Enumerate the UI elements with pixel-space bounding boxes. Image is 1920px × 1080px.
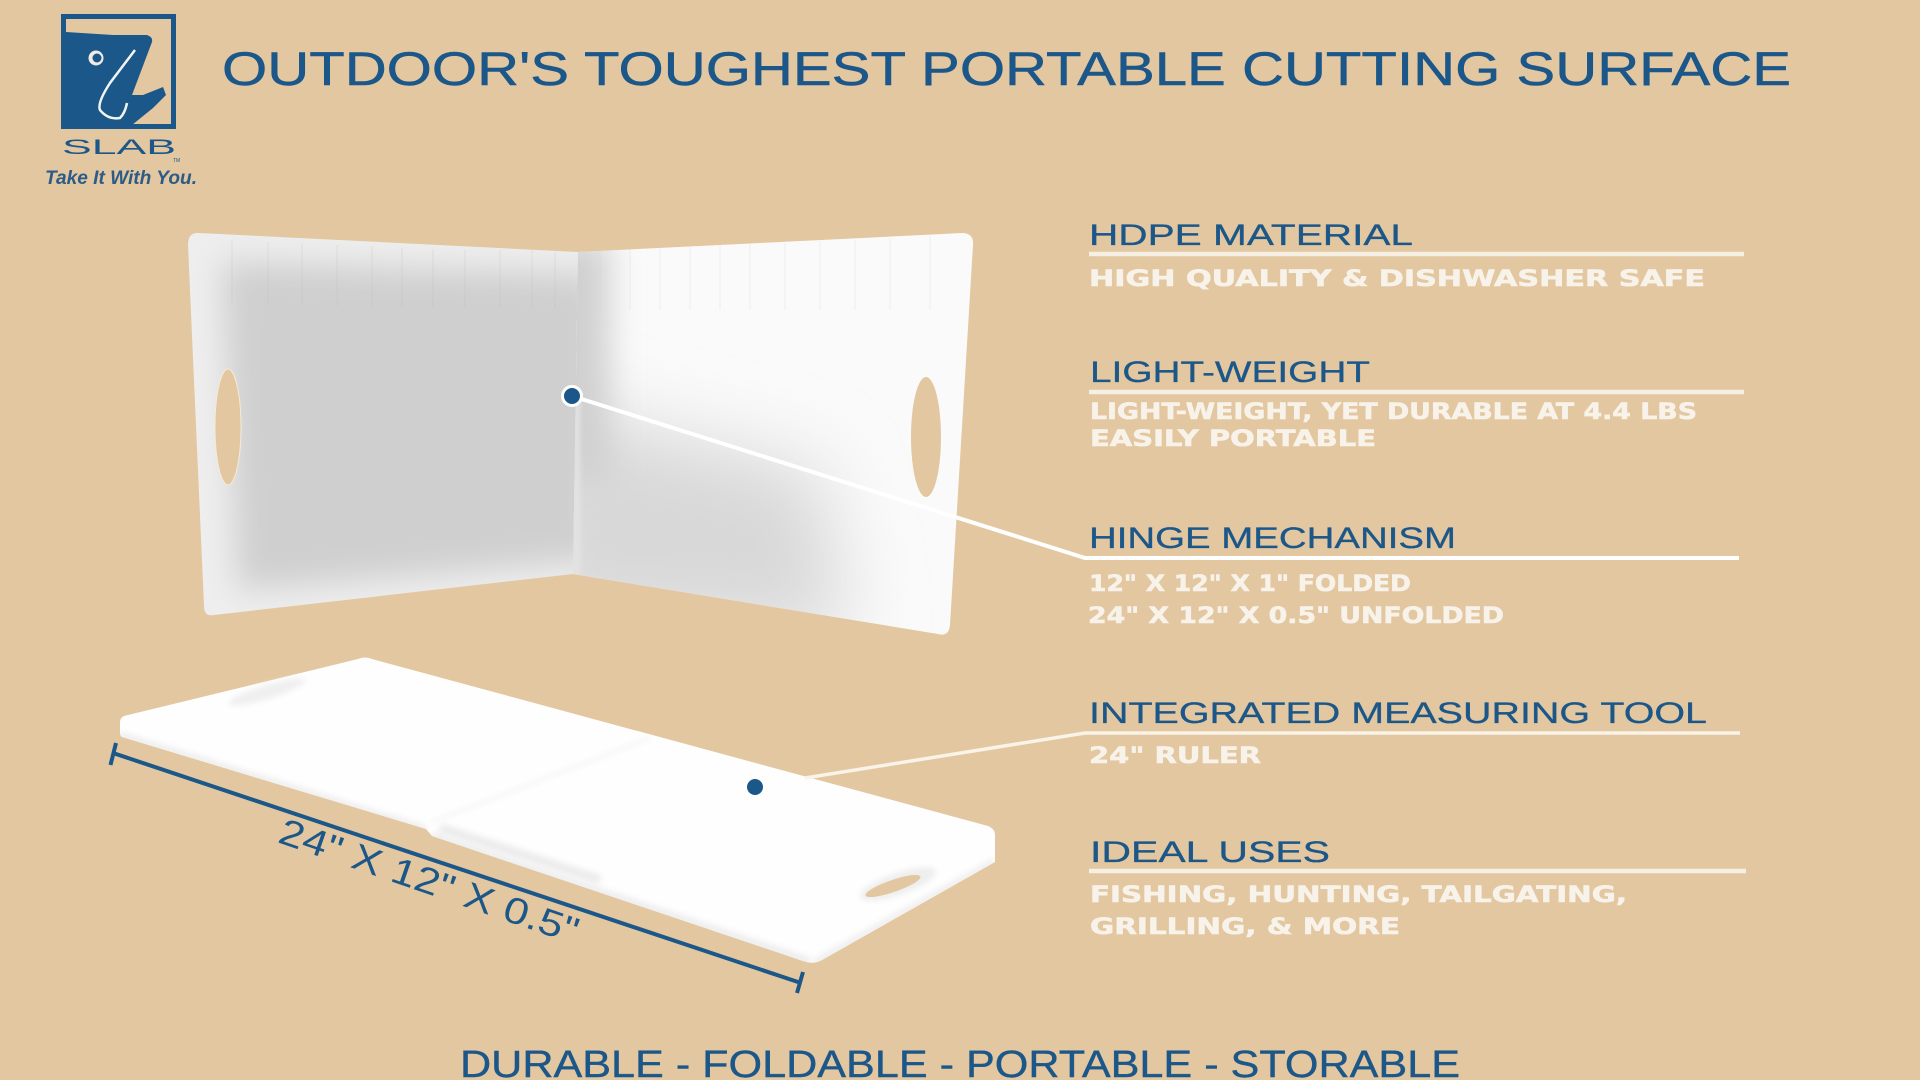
heading: HINGE MECHANISM xyxy=(1089,522,1456,555)
board body xyxy=(120,658,995,963)
title: OUTDOOR'S TOUGHEST PORTABLE CUTTING SURFACE xyxy=(222,42,1791,95)
logo tagline: Take It With You. xyxy=(45,168,197,189)
description: LIGHT-WEIGHT, YET DURABLE AT 4.4 LBS xyxy=(1090,400,1697,425)
description: 24" X 12" X 0.5" UNFOLDED xyxy=(1088,604,1504,629)
feature: ideal uses xyxy=(1089,836,1746,940)
logo fish xyxy=(66,32,166,125)
description: FISHING, HUNTING, TAILGATING, xyxy=(1090,883,1627,908)
logo square xyxy=(64,16,174,126)
hinge callout xyxy=(562,386,1739,558)
description: HIGH QUALITY & DISHWASHER SAFE xyxy=(1089,267,1705,292)
leader line xyxy=(805,733,1740,778)
description: 12" X 12" X 1" FOLDED xyxy=(1089,572,1411,597)
logo xyxy=(45,16,197,189)
flat board illustration xyxy=(120,658,995,963)
feature: hdpe material xyxy=(1089,219,1744,292)
left handle xyxy=(227,674,307,710)
measuring tool callout xyxy=(747,733,1740,795)
folded board illustration xyxy=(180,225,980,645)
logo wordmark: SLAB xyxy=(62,136,176,159)
heading: HDPE MATERIAL xyxy=(1089,219,1413,252)
dimension label: 24" X 12" X 0.5" xyxy=(274,811,584,952)
right handle hole xyxy=(911,377,941,497)
edge shading xyxy=(120,735,995,963)
right panel xyxy=(573,233,974,635)
description xyxy=(1090,883,1627,940)
leader line xyxy=(572,396,1739,558)
description xyxy=(1088,572,1504,629)
marker dot xyxy=(562,386,582,406)
description xyxy=(1090,400,1697,452)
marker dot xyxy=(747,779,763,795)
dimension line xyxy=(110,743,803,993)
feature: light-weight xyxy=(1089,356,1744,452)
heading: INTEGRATED MEASURING TOOL xyxy=(1089,697,1707,730)
description: 24" RULER xyxy=(1089,744,1261,769)
description: GRILLING, & MORE xyxy=(1090,915,1400,940)
left handle hole xyxy=(215,369,241,485)
right handle xyxy=(857,861,939,907)
fold seam xyxy=(432,738,650,822)
feature: integrated measuring tool xyxy=(1089,697,1707,769)
feature: hinge mechanism xyxy=(1088,522,1504,629)
heading: LIGHT-WEIGHT xyxy=(1090,356,1370,389)
left panel xyxy=(188,232,578,616)
heading: IDEAL USES xyxy=(1090,836,1330,869)
logo trademark: TM xyxy=(173,158,180,164)
description: EASILY PORTABLE xyxy=(1090,427,1376,452)
logo hook xyxy=(99,50,135,118)
logo eye xyxy=(88,50,104,66)
